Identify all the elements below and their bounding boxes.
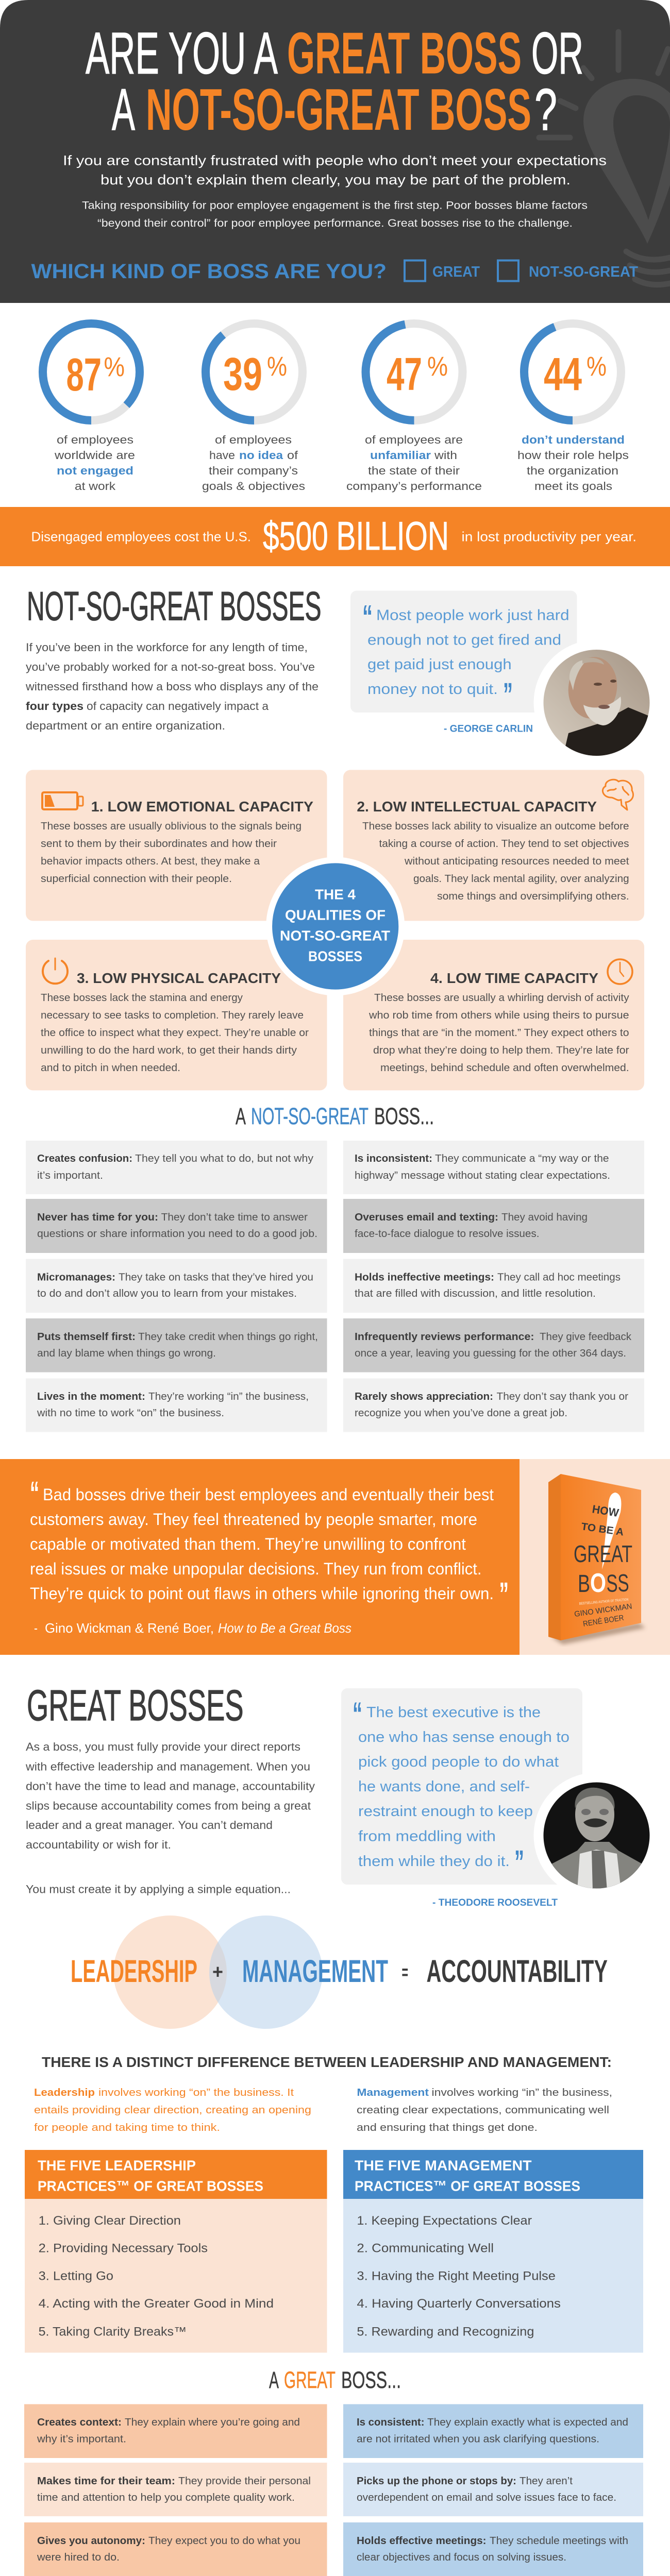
subheading: a great boss: BOSS... [341, 2367, 401, 2393]
panel: low emotional capacity [26, 770, 327, 921]
background lightbulb [539, 32, 670, 285]
section intro text: accountability or wish for it. [26, 1838, 171, 1851]
subheading: a great boss: A [269, 2367, 279, 2393]
panel: low time capacity: things that are “in the moment.” They expect others to [369, 1027, 629, 1039]
title: A [112, 77, 135, 143]
management definition: creating clear expectations, communicating well [357, 2104, 609, 2116]
equation: leadership + management = accountability: MANAGEMENT [242, 1954, 388, 1989]
section intro text: four types [26, 700, 83, 713]
trait row 3 [26, 1259, 644, 1313]
intro statement: but you don’t explain them clearly, you may be part of the problem. [100, 172, 571, 188]
section intro text: department or an entire organization. [26, 719, 225, 732]
panel: low intellectual capacity: without anticipating resources needed to meet [404, 855, 629, 867]
trait row 2 [26, 1199, 644, 1253]
section intro text: witnessed firsthand how a boss who displays any of the [25, 680, 319, 693]
panel: five management practices: THE FIVE MANAGEMENT [355, 2158, 532, 2173]
trait row 3: They call ad hoc meetings [497, 1271, 621, 1283]
trait row 1 [24, 2404, 643, 2458]
panel: five management practices: 2. Communicating Well [357, 2242, 494, 2256]
intro statement: If you are constantly frustrated with people who don’t meet your expectations [63, 153, 607, 168]
stat: 47 percent [346, 324, 482, 493]
panel: low emotional capacity: superficial connection with their people. [41, 873, 232, 885]
book cover: GINO WICKMAN [574, 1602, 632, 1619]
great boss traits grid [24, 2404, 643, 2576]
leadership definition: Leadership [34, 2087, 95, 2098]
trait row 2: They provide their personal [178, 2475, 311, 2487]
panel: low emotional capacity: These bosses are usually oblivious to the signals being [41, 820, 301, 832]
trait row 5: with no time to work “on” the business. [37, 1407, 224, 1419]
photo: George Carlin [543, 650, 649, 756]
quote attribution: Gino Wickman & René Boer, [45, 1620, 214, 1636]
banner: $500 billion: $500 BILLION [263, 513, 449, 558]
stat: 87 percent: % [104, 352, 125, 382]
management definition: Management [357, 2087, 429, 2098]
icon: clock [608, 959, 632, 984]
section intro text: You must create it by applying a simple equation... [26, 1883, 291, 1896]
book cover: HOW [591, 1502, 620, 1519]
trait row 3: Micromanages: [37, 1271, 115, 1283]
management definition [357, 2087, 612, 2133]
distinct difference heading: THERE IS A DISTINCT DIFFERENCE BETWEEN LEADERSHIP AND MANAGEMENT: [42, 2054, 612, 2070]
book quote band: real issues or make unpopular decisions. They run from conflict. [30, 1560, 481, 1578]
stat: 44 percent [517, 324, 629, 493]
trait row 2: Makes time for their team: [37, 2475, 175, 2487]
quote: Theodore Roosevelt [341, 1688, 660, 1908]
equation: leadership + management = accountability [71, 1916, 608, 2029]
panel: low intellectual capacity: 2. LOW INTELLECTUAL CAPACITY [357, 799, 597, 815]
boss type question with checkboxes: NOT-SO-GREAT [529, 264, 638, 280]
panel: low intellectual capacity: These bosses lack ability to visualize an outcome before [362, 820, 629, 832]
trait row 2 [24, 2463, 643, 2516]
management definition: and ensuring that things get done. [357, 2122, 538, 2133]
panel: low emotional capacity: sent to them by their subordinates and how their [41, 838, 277, 850]
section intro text: As a boss, you must fully provide your direct reports [26, 1740, 300, 1753]
boss type question with checkboxes: WHICH KIND OF BOSS ARE YOU? [31, 260, 387, 283]
trait row 1: They explain exactly what is expected and [427, 2416, 628, 2428]
trait row 3: They expect you to do what you [148, 2535, 300, 2547]
title: OR [531, 21, 583, 87]
trait row 5: recognize you when you’ve done a great job. [355, 1407, 567, 1419]
trait row 1: They communicate a “my way or the [435, 1153, 609, 1164]
section heading: great bosses: GREAT BOSSES [27, 1681, 244, 1730]
book quote band: Bad bosses drive their best employees and eventually their best [43, 1485, 494, 1504]
quote: George Carlin: get paid just enough [367, 656, 512, 673]
trait row 5: Rarely shows appreciation: [355, 1391, 493, 1402]
section intro text: of capacity can negatively impact a [87, 700, 269, 713]
quote: George Carlin: money not to quit. [367, 681, 498, 698]
photo: Theodore Roosevelt [541, 1780, 652, 1891]
book quote band: customers away. They feel threatened by people smarter, more [30, 1510, 477, 1529]
subheading: a not-so-great boss: BOSS... [374, 1103, 434, 1129]
trait row 1: Creates context: [37, 2416, 122, 2428]
panel: five leadership practices: THE FIVE LEADERSHIP [38, 2158, 196, 2173]
stat: 47 percent: % [427, 351, 448, 382]
panel: low time capacity: 4. LOW TIME CAPACITY [430, 970, 598, 986]
icon: low battery [42, 792, 83, 809]
trait row 1: Is inconsistent: [355, 1153, 432, 1164]
trait row 2: overdependent on email and solve issues face to face. [357, 2492, 616, 2503]
trait row 2: face-to-face dialogue to resolve issues. [355, 1228, 539, 1240]
section intro text: leader and a great manager. You can’t demand [26, 1819, 273, 1832]
panel: five leadership practices: 5. Taking Clarity Breaks™ [39, 2325, 187, 2339]
trait row 2: time and attention to help you complete quality work. [37, 2492, 295, 2503]
book quote band: They’re quick to point out flaws in others while ignoring their own. [30, 1584, 494, 1603]
trait row 1: it’s important. [37, 1170, 103, 1181]
trait row 1 [26, 1141, 644, 1194]
title: ? [534, 77, 557, 143]
panel: low time capacity [343, 940, 644, 1090]
quote: George Carlin: Most people work just hard [376, 607, 569, 624]
stat: 87 percent: at work [75, 480, 116, 493]
quote: Theodore Roosevelt: he wants done, and self- [358, 1778, 530, 1795]
trait row 3: Holds effective meetings: [357, 2535, 487, 2547]
intro statement [63, 153, 607, 188]
subheading: a not-so-great boss: NOT-SO-GREAT [251, 1103, 368, 1129]
banner: $500 billion [0, 507, 670, 566]
stat: 87 percent: of employees [57, 433, 133, 446]
stat: 47 percent: the state of their [368, 464, 460, 477]
intro supporting text [82, 199, 588, 229]
stat: 47 percent: 47 [387, 349, 422, 400]
trait row 2: They avoid having [501, 1211, 588, 1223]
stat: 47 percent: of employees are [365, 433, 463, 446]
banner: $500 billion: in lost productivity per year. [462, 529, 636, 545]
quote: George Carlin: “ [362, 598, 373, 635]
leadership definition [34, 2087, 311, 2133]
stat: 39 percent: 39 [223, 349, 262, 400]
panel: five management practices: 1. Keeping Expectations Clear [357, 2214, 532, 2228]
equation: leadership + management = accountability: LEADERSHIP [71, 1954, 197, 1989]
quote: Theodore Roosevelt: “ [353, 1696, 362, 1733]
icon: power button [43, 958, 68, 984]
trait row 5: They’re working “in” the business, [148, 1391, 309, 1402]
trait row 4: and lay blame when things go wrong. [37, 1347, 216, 1359]
panel: low physical capacity: necessary to see tasks to completion. They rarely leave [41, 1009, 304, 1021]
quote: Theodore Roosevelt: pick good people to do what [358, 1754, 559, 1770]
trait row 1: Is consistent: [357, 2416, 425, 2428]
stat: 39 percent: no idea [239, 449, 283, 462]
book quote band: capable or motivated than them. They’re unwilling to confront [30, 1535, 466, 1553]
panel: low intellectual capacity [343, 770, 644, 921]
panel: low intellectual capacity: some things and oversimplifying others. [437, 890, 629, 902]
book cover: RENÉ BOER [582, 1614, 625, 1629]
quote attribution: - THEODORE ROOSEVELT [432, 1897, 558, 1908]
section intro text: If you’ve been in the workforce for any length of time, [26, 641, 308, 654]
quote attribution: How to Be a Great Boss [218, 1620, 351, 1636]
center badge: 4 qualities: NOT-SO-GREAT [280, 928, 390, 944]
trait row 4: They take credit when things go right, [138, 1331, 318, 1343]
equation: leadership + management = accountability: = [402, 1962, 408, 1984]
trait row 2: Never has time for you: [37, 1211, 158, 1223]
trait row 5 [26, 1379, 644, 1432]
quote attribution: - [34, 1620, 38, 1636]
panel: low emotional capacity: 1. LOW EMOTIONAL CAPACITY [91, 799, 313, 815]
stat: 44 percent: the organization [527, 464, 618, 477]
panel: low time capacity: These bosses are usually a whirling dervish of activity [374, 992, 629, 1004]
stat: 87 percent [43, 324, 140, 493]
trait row 1: highway” message without stating clear expectations. [355, 1170, 610, 1181]
subheading: a great boss: GREAT [284, 2367, 336, 2393]
book quote band [0, 1459, 670, 1655]
trait row 2: They aren’t [520, 2475, 573, 2487]
stat: 44 percent: how their role helps [517, 449, 629, 462]
leadership definition: involves working “on” the business. It [98, 2087, 294, 2098]
stat: 39 percent: of employees [215, 433, 292, 446]
stat: 39 percent: of [287, 449, 298, 462]
center badge: 4 qualities: THE 4 [315, 887, 356, 903]
section intro text: with effective leadership and management. When you [25, 1760, 310, 1773]
panel: low physical capacity: 3. LOW PHYSICAL CAPACITY [77, 970, 281, 986]
trait row 3: clear objectives and focus on solving issues. [357, 2551, 566, 2563]
trait row 1: are not irritated when you ask clarifying questions. [357, 2433, 599, 2445]
panel: low time capacity: meetings, behind schedule and often overwhelmed. [380, 1062, 629, 1074]
trait row 1: They tell you what to do, but not why [135, 1153, 314, 1164]
panel: five management practices: 4. Having Quarterly Conversations [357, 2297, 561, 2311]
book cover: TO BE A [580, 1521, 625, 1538]
panel: five management practices [343, 2150, 643, 2352]
book cover [548, 1474, 645, 1645]
stat: 47 percent: with [434, 449, 457, 462]
panel: five management practices: PRACTICES™ OF GREAT BOSSES [355, 2178, 580, 2194]
book cover: O [590, 1568, 606, 1598]
leadership definition: for people and taking time to think. [34, 2122, 220, 2133]
trait row 2: Overuses email and texting: [355, 1211, 498, 1223]
title [86, 21, 583, 143]
panel: five management practices: 3. Having the Right Meeting Pulse [357, 2269, 556, 2283]
section intro text: slips because accountability comes from being a great [26, 1800, 311, 1812]
boss type question with checkboxes [31, 260, 638, 283]
trait row 3: that are filled with discussion, and little resolution. [355, 1287, 596, 1299]
section intro text: you’ve probably worked for a not-so-great boss. You’ve [26, 660, 315, 673]
book cover: B [578, 1570, 590, 1598]
quote: Theodore Roosevelt: The best executive is the [366, 1704, 541, 1721]
panel: low emotional capacity: behavior impacts others. At best, they make a [41, 855, 260, 867]
quote attribution: - GEORGE CARLIN [444, 723, 533, 735]
quote: Theodore Roosevelt: one who has sense enough to [358, 1729, 569, 1745]
trait row 1: why it’s important. [37, 2433, 126, 2445]
book cover: BESTSELLING AUTHOR OF TRACTION [579, 1598, 629, 1606]
trait row 2: They don’t take time to answer [161, 1211, 308, 1223]
panel: five management practices: 5. Rewarding and Recognizing [357, 2325, 534, 2339]
stat: 47 percent: company’s performance [346, 480, 482, 493]
panel: five leadership practices: PRACTICES™ OF GREAT BOSSES [38, 2178, 263, 2194]
header panel [0, 0, 670, 303]
stat: 87 percent: not engaged [57, 464, 133, 477]
stat: 39 percent: their company’s [209, 464, 298, 477]
book cover: SS [606, 1569, 629, 1598]
title: GREAT BOSS [287, 21, 522, 87]
section intro text [25, 1740, 315, 1896]
panel: low time capacity: who rob time from others while using theirs to pursue [368, 1009, 629, 1021]
section heading: not-so-great bosses: NOT-SO-GREAT BOSSES [27, 583, 322, 629]
trait row 3: were hired to do. [37, 2551, 120, 2563]
trait row 4: Infrequently reviews performance: [355, 1331, 534, 1343]
trait row 1: They explain where you’re going and [125, 2416, 300, 2428]
trait row 3: Gives you autonomy: [37, 2535, 145, 2547]
panel: low physical capacity: and to pitch in when needed. [41, 1062, 180, 1074]
quote: Theodore Roosevelt: restraint enough to keep [358, 1803, 533, 1820]
panel: low intellectual capacity: taking a course of action. They tend to set objectives [379, 838, 629, 850]
quote: Theodore Roosevelt: from meddling with [358, 1828, 496, 1844]
panel: five leadership practices: 1. Giving Clear Direction [39, 2214, 181, 2228]
stat: 44 percent: % [587, 351, 607, 382]
stat: 87 percent: worldwide are [54, 449, 135, 462]
panel: five leadership practices [25, 2150, 327, 2352]
center badge: 4 qualities [266, 857, 405, 995]
center badge: 4 qualities: QUALITIES OF [285, 907, 386, 923]
quote: George Carlin: enough not to get fired and [367, 632, 561, 649]
panel: low time capacity: drop what they’re doing to help them. They’re late for [373, 1044, 629, 1056]
panel: five leadership practices: 2. Providing Necessary Tools [39, 2242, 208, 2256]
trait row 3: They schedule meetings with [490, 2535, 628, 2547]
panel: five leadership practices: 3. Letting Go [39, 2269, 113, 2283]
intro supporting text: Taking responsibility for poor employee engagement is the first step. Poor bosses blame factors [82, 199, 588, 211]
quote: Theodore Roosevelt: ” [514, 1843, 524, 1880]
section intro text: don’t have the time to lead and manage, accountability [26, 1780, 315, 1793]
quote: George Carlin: ” [503, 676, 513, 713]
boss type question with checkboxes: GREAT [432, 264, 480, 280]
trait row 2: Picks up the phone or stops by: [357, 2475, 516, 2487]
trait row 3: They take on tasks that they’ve hired you [119, 1271, 313, 1283]
intro supporting text: “beyond their control” for poor employee performance. Great bosses rise to the challenge. [97, 217, 573, 229]
management definition: involves working “in” the business, [432, 2087, 612, 2098]
stat: 47 percent: unfamiliar [370, 449, 431, 462]
quote: George Carlin [350, 590, 660, 766]
trait row 4: once a year, leaving you guessing for the other 364 days. [355, 1347, 626, 1359]
leadership definition: entails providing clear direction, creating an opening [34, 2104, 311, 2116]
book cover: GREAT [574, 1540, 632, 1567]
icon: brain [602, 779, 633, 810]
panel: low physical capacity [26, 940, 327, 1090]
panel: low physical capacity: the office to inspect what they expect. They’re unable or [41, 1027, 309, 1039]
equation: leadership + management = accountability: + [212, 1961, 223, 1983]
trait row 2: questions or share information you need to do a good job. [37, 1228, 317, 1240]
trait row 4: They give feedback [540, 1331, 632, 1343]
panel: low intellectual capacity: goals. They lack mental agility, over analyzing [413, 873, 629, 885]
stat: 39 percent: have [209, 449, 235, 462]
stat: 44 percent: 44 [544, 349, 582, 400]
stat: 39 percent: % [267, 351, 287, 382]
book quote band: ” [499, 1575, 509, 1613]
not-so-great boss traits grid [26, 1141, 644, 1432]
subheading: a great boss [269, 2367, 401, 2393]
trait row 1: Creates confusion: [37, 1153, 132, 1164]
title: ARE YOU A [86, 21, 278, 87]
panel: low physical capacity: unwilling to do the hard work, to get their hands dirty [41, 1044, 297, 1056]
quote attribution [34, 1620, 351, 1636]
stat: 39 percent [202, 324, 305, 493]
quote: Theodore Roosevelt: them while they do it. [358, 1853, 510, 1870]
subheading: a not-so-great boss: A [236, 1103, 246, 1129]
trait row 5: They don’t say thank you or [497, 1391, 628, 1402]
trait row 4 [26, 1318, 644, 1372]
trait row 3: Holds ineffective meetings: [355, 1271, 494, 1283]
stat: 44 percent: meet its goals [534, 480, 612, 493]
trait row 5: Lives in the moment: [37, 1391, 145, 1402]
section intro text [25, 641, 319, 732]
trait row 3: to do and don’t allow you to learn from your mistakes. [37, 1287, 297, 1299]
trait row 4: Puts themself first: [37, 1331, 136, 1343]
stat: 87 percent: 87 [66, 349, 102, 401]
trait row 3 [24, 2522, 643, 2576]
panel: low physical capacity: These bosses lack the stamina and energy [41, 992, 243, 1004]
center badge: 4 qualities: BOSSES [308, 948, 362, 964]
banner: $500 billion: Disengaged employees cost the U.S. [31, 529, 251, 545]
book quote band: “ [30, 1475, 39, 1512]
panel: five leadership practices: 4. Acting with the Greater Good in Mind [39, 2297, 274, 2311]
stat: 39 percent: goals & objectives [202, 480, 305, 493]
stat: 44 percent: don’t understand [522, 433, 625, 446]
